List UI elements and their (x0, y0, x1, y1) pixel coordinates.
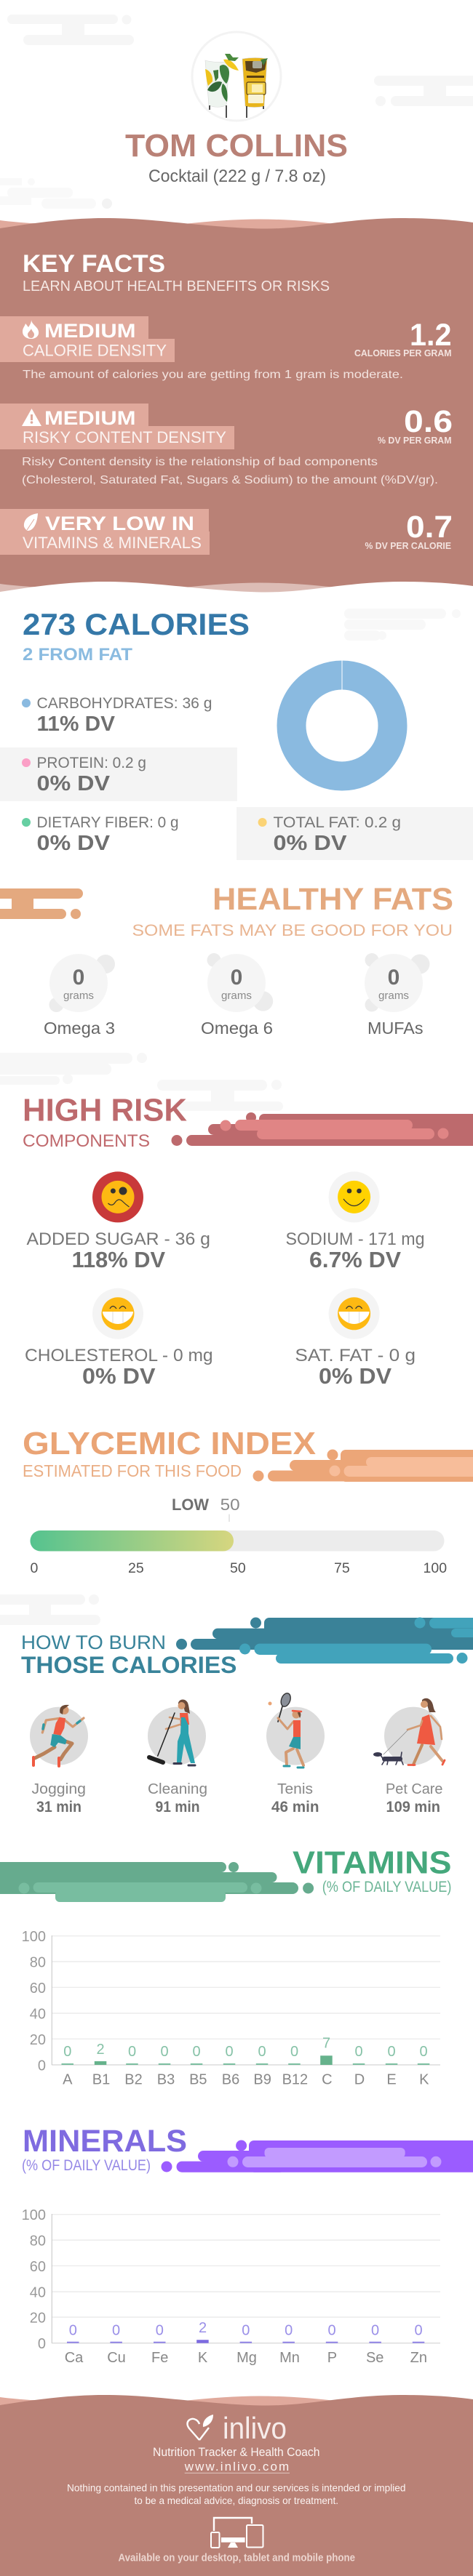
gauge: glycemic value (31, 1496, 447, 1576)
activity: tennis: 46 min (271, 1799, 319, 1815)
bar chart: vitamins: 60 (30, 1981, 46, 1997)
bar chart: vitamins: 0 (225, 2044, 234, 2060)
legend: total fat (236, 807, 473, 860)
item: added sugar (26, 1171, 210, 1272)
bar chart: minerals: 0 (327, 2323, 336, 2339)
bar chart: vitamins: 0 (160, 2044, 169, 2060)
stat: omega 3: grams (63, 990, 94, 1002)
badge: risky content density: MEDIUM (44, 407, 135, 429)
badge: vitamins and minerals (0, 509, 210, 555)
bar chart: minerals: 60 (30, 2259, 46, 2275)
badge: calorie density (0, 316, 175, 362)
panel: vitamins (0, 1845, 451, 2088)
bar chart: minerals: Fe (151, 2350, 168, 2366)
bar chart: vitamins: K (419, 2072, 429, 2088)
stat: omega 6: 0 (231, 966, 242, 990)
stat: mufas: grams (378, 990, 409, 1002)
text: disclaimer: to be a medical advice, diagnosis or treatment. (134, 2495, 338, 2506)
bar chart: vitamins: B1 (92, 2072, 110, 2088)
item: sodium: SODIUM - 171 mg (285, 1229, 425, 1249)
item: saturated fat: SAT. FAT - 0 g (295, 1346, 416, 1365)
text: calorie density description: The amount of calories you are getting from 1 gram is moderate. (23, 369, 403, 381)
icon: smiling face (329, 1171, 380, 1222)
activity: pet care: 109 min (386, 1799, 440, 1815)
metric: dv per calorie (365, 510, 453, 551)
stat: omega 6 (201, 953, 273, 1038)
bar chart: vitamins: 0 (354, 2044, 363, 2060)
bar chart: vitamins: A (63, 2072, 73, 2088)
activity: jogging: 31 min (36, 1799, 82, 1815)
panel: glycemic index (23, 1426, 473, 1576)
bar chart: minerals: 0 (38, 2336, 46, 2352)
stat: omega 3 (44, 954, 115, 1038)
badge: vitamins and minerals: VITAMINS & MINERALS (23, 534, 202, 552)
bar chart: vitamins: B6 (222, 2072, 239, 2088)
bar chart: vitamins: 2 (96, 2042, 105, 2058)
gauge: glycemic value: 100 (424, 1560, 447, 1576)
link: website: www.inlivo.com (184, 2460, 289, 2473)
metric: dv per gram (378, 404, 453, 446)
metric: dv per gram: % DV PER GRAM (378, 435, 451, 446)
bar chart: vitamins: 0 (387, 2044, 396, 2060)
text: disclaimer (67, 2482, 406, 2506)
heading: minerals: MINERALS (23, 2124, 187, 2159)
gauge: glycemic value: 0 (31, 1560, 38, 1576)
metric: calories per gram: 1.2 (410, 318, 451, 353)
heading: key facts: KEY FACTS (23, 250, 165, 278)
legend: dietary fiber (22, 814, 179, 855)
legend: total fat: 0% DV (274, 832, 347, 855)
icon: person sweeping (148, 1700, 206, 1765)
panel: key facts (0, 218, 473, 603)
bar chart: minerals: 80 (30, 2234, 46, 2250)
bar chart: vitamins: B12 (282, 2072, 308, 2088)
chart: macronutrient donut (291, 660, 393, 777)
bar chart: minerals: 0 (156, 2323, 164, 2339)
bar chart: minerals: 0 (414, 2323, 423, 2339)
bar chart: minerals: Mg (236, 2350, 257, 2366)
logo: inlivo: inlivo (223, 2411, 287, 2445)
activity: pet care: Pet Care (386, 1781, 442, 1797)
bar chart: vitamins: 40 (30, 2007, 46, 2023)
subheading: (% OF DAILY VALUE) (322, 1879, 451, 1895)
panel: healthy fats (0, 882, 453, 1038)
heading: vitamins: VITAMINS (293, 1845, 451, 1881)
bar chart: vitamins: 0 (258, 2044, 266, 2060)
icon: flame (23, 320, 39, 339)
bar chart: vitamins: 0 (38, 2058, 46, 2074)
activity: pet care (373, 1698, 445, 1815)
heading: those calories: THOSE CALORIES (21, 1652, 236, 1678)
legend: total fat: TOTAL FAT: 0.2 g (274, 814, 401, 831)
gauge: glycemic value: 50 (230, 1560, 246, 1576)
activity: jogging (30, 1705, 88, 1815)
badge: risky content density (0, 404, 234, 449)
panel: calories (0, 607, 473, 860)
subheading: components: COMPONENTS (23, 1131, 150, 1151)
icon: woman walking dog (373, 1698, 445, 1765)
text: risky content description (22, 456, 438, 486)
subheading: (% OF DAILY VALUE) (22, 2157, 151, 2174)
item: saturated fat: 0% DV (319, 1363, 391, 1389)
bar chart: minerals: Ca (65, 2350, 84, 2366)
metric: dv per calorie: 0.7 (406, 510, 453, 545)
bar chart: vitamins: E (386, 2072, 397, 2088)
bar chart: vitamins (22, 1929, 440, 2088)
legend: carbohydrates: 11% DV (36, 713, 116, 736)
stat: omega 6: grams (221, 990, 252, 1002)
heading: high risk: HIGH RISK (23, 1092, 187, 1128)
bar chart: minerals: 0 (112, 2323, 120, 2339)
bar chart: vitamins: 0 (63, 2044, 71, 2060)
activity: cleaning: Cleaning (148, 1781, 207, 1797)
gauge: glycemic value: 25 (128, 1560, 144, 1576)
legend: carbohydrates: CARBOHYDRATES: 36 g (36, 695, 212, 712)
bar chart: vitamins: D (354, 2072, 365, 2088)
bar chart: vitamins: B3 (157, 2072, 175, 2088)
bar chart: vitamins: C (322, 2072, 333, 2088)
panel: high risk components (0, 1053, 473, 1389)
stat: mufas (365, 953, 429, 1038)
text: availability: Available on your desktop, tablet and mobile phone (118, 2553, 355, 2564)
bar chart: vitamins: 0 (419, 2044, 428, 2060)
item: sodium: 6.7% DV (309, 1247, 401, 1272)
stat: omega 6: Omega 6 (201, 1019, 273, 1038)
bar chart: minerals: 0 (285, 2323, 293, 2339)
bar chart: minerals (22, 2207, 440, 2366)
item: added sugar: ADDED SUGAR - 36 g (26, 1229, 210, 1249)
legend: protein (0, 747, 237, 801)
activity: cleaning (148, 1700, 207, 1815)
subheading: LEARN ABOUT HEALTH BENEFITS OR RISKS (23, 278, 330, 294)
legend: dietary fiber: 0% DV (36, 832, 111, 855)
bar chart: minerals: 0 (242, 2323, 250, 2339)
title: TOM COLLINS (125, 128, 348, 164)
stat: mufas: 0 (388, 966, 400, 990)
gauge: glycemic value: LOW (172, 1496, 209, 1514)
heading: glycemic index: GLYCEMIC INDEX (23, 1426, 316, 1461)
bar chart: minerals: 2 (199, 2320, 207, 2336)
text: disclaimer: Nothing contained in this presentation and our services is intended or implied (67, 2482, 406, 2494)
bar chart: minerals: 0 (69, 2323, 77, 2339)
header panel (0, 15, 473, 209)
bar chart: vitamins: 0 (290, 2044, 298, 2060)
bar chart: vitamins: 0 (128, 2044, 136, 2060)
bar chart: minerals: P (327, 2350, 337, 2366)
logo: inlivo (187, 2411, 287, 2445)
gauge: glycemic value: 75 (334, 1560, 350, 1576)
gauge: glycemic value: 50 (220, 1496, 240, 1514)
text: risky content description: (Cholesterol, Saturated Fat, Sugars & Sodium) to the amount (%DV/gr). (22, 474, 438, 486)
icon: warning triangle (22, 409, 41, 426)
item: sodium (285, 1171, 425, 1272)
stat: omega 3: Omega 3 (44, 1019, 115, 1038)
badge: calorie density: CALORIE DENSITY (23, 342, 167, 359)
metric: calories per gram (354, 318, 451, 358)
icon: grinning face (92, 1288, 143, 1339)
stat: omega 3: 0 (73, 966, 84, 990)
bar chart: minerals: Zn (410, 2350, 427, 2366)
bar chart: vitamins: 7 (322, 2036, 330, 2052)
activity: jogging: Jogging (32, 1781, 86, 1797)
bar chart: vitamins: B5 (189, 2072, 207, 2088)
icon: jogger (30, 1705, 88, 1766)
metric: dv per calorie: % DV PER CALORIE (365, 540, 451, 551)
activity: tennis (266, 1692, 325, 1815)
bar chart: minerals: 40 (30, 2284, 46, 2300)
bar chart: vitamins: 20 (30, 2032, 46, 2048)
icon: grinning face (329, 1288, 380, 1339)
subheading: SOME FATS MAY BE GOOD FOR YOU (132, 921, 453, 939)
metric: calories per gram: CALORIES PER GRAM (354, 348, 451, 358)
bar chart: minerals: 0 (371, 2323, 379, 2339)
icon: devices (211, 2518, 263, 2548)
text: risky content description: Risky Content density is the relationship of bad components (22, 456, 378, 468)
item: saturated fat (295, 1288, 416, 1389)
text: tagline: Nutrition Tracker & Health Coach (153, 2445, 320, 2459)
icon: leaf (24, 513, 38, 531)
panel: footer (0, 2395, 473, 2576)
legend: dietary fiber: DIETARY FIBER: 0 g (36, 814, 179, 831)
item: cholesterol: 0% DV (82, 1363, 156, 1389)
bar chart: minerals: 100 (22, 2207, 46, 2223)
icon: worried face (92, 1171, 143, 1222)
subtitle: Cocktail (222 g / 7.8 oz) (148, 166, 326, 186)
bar chart: vitamins: B2 (124, 2072, 143, 2088)
bar chart: minerals: Mn (279, 2350, 300, 2366)
heading: healthy fats: HEALTHY FATS (212, 882, 453, 917)
subheading: ESTIMATED FOR THIS FOOD (23, 1461, 242, 1480)
icon: tennis player (266, 1692, 325, 1768)
legend: protein: PROTEIN: 0.2 g (36, 755, 146, 771)
bar chart: minerals: Se (366, 2350, 383, 2366)
item: cholesterol: CHOLESTEROL - 0 mg (25, 1346, 213, 1365)
badge: risky content density: RISKY CONTENT DENSITY (23, 428, 226, 446)
stat: mufas: MUFAs (367, 1019, 424, 1038)
heading: how to burn: HOW TO BURN (21, 1632, 166, 1653)
legend: protein: 0% DV (36, 772, 111, 795)
panel: how to burn those calories (0, 1594, 473, 1815)
activity: tennis: Tenis (277, 1781, 313, 1797)
heading: 273 calories: 273 CALORIES (23, 607, 250, 641)
bar chart: minerals: Cu (107, 2350, 126, 2366)
bar chart: minerals: 20 (30, 2311, 46, 2327)
bar chart: vitamins: 0 (192, 2044, 201, 2060)
activity: cleaning: 91 min (156, 1799, 199, 1815)
icon: heart and leaf (187, 2415, 213, 2440)
bar chart: vitamins: 100 (22, 1929, 46, 1945)
badge: calorie density: MEDIUM (44, 320, 135, 342)
bar chart: vitamins: B9 (253, 2072, 271, 2088)
subheading: from fat: 2 FROM FAT (23, 645, 132, 665)
bar chart: vitamins: 80 (30, 1954, 46, 1970)
legend: carbohydrates (22, 695, 212, 736)
panel: minerals (22, 2124, 473, 2366)
item: added sugar: 118% DV (72, 1247, 165, 1272)
icon: cocktail glasses (192, 32, 281, 121)
badge: vitamins and minerals: VERY LOW IN (45, 513, 194, 534)
item: cholesterol (25, 1288, 213, 1389)
bar chart: minerals: K (198, 2350, 208, 2366)
metric: dv per gram: 0.6 (404, 404, 453, 439)
